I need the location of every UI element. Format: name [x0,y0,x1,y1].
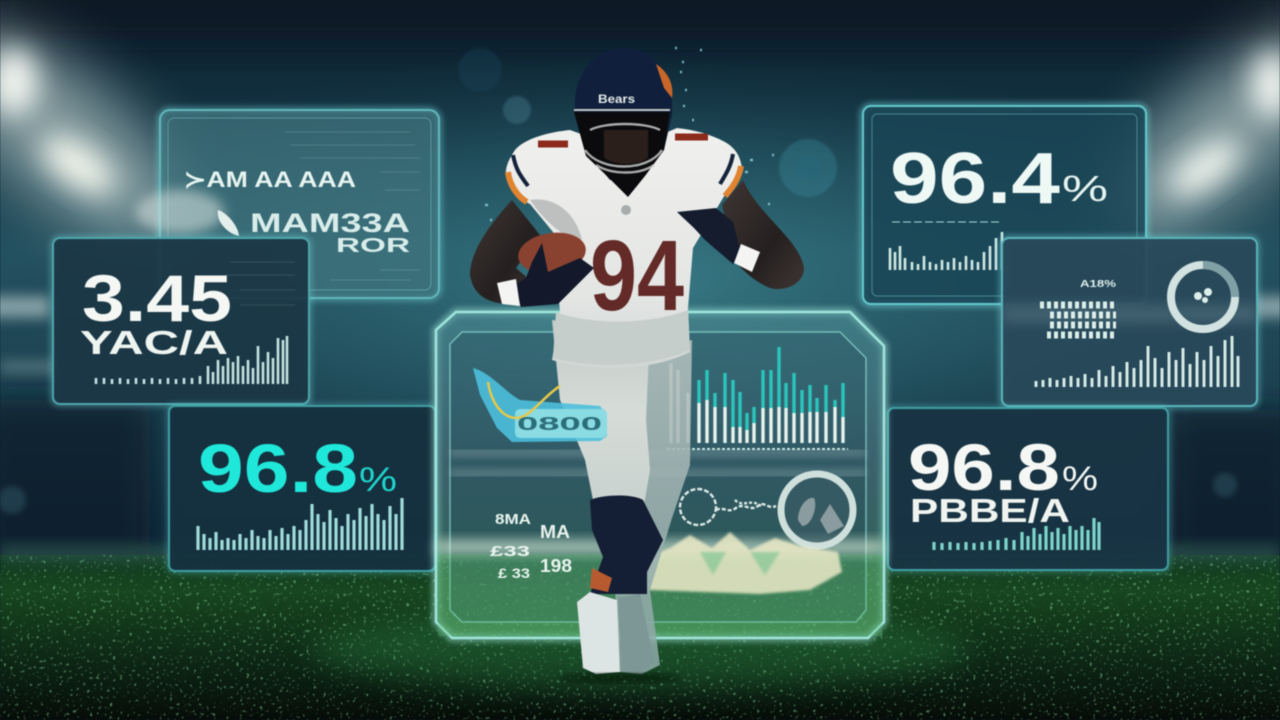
sleeve navy left [513,155,528,186]
jersey [506,128,742,368]
label glyphs: A18% [1080,279,1116,290]
glyph blob [218,210,239,236]
helmet [574,48,672,197]
left shoe [577,592,620,674]
helmet stripe [656,64,672,98]
area chart [647,532,842,594]
grass field [0,545,1280,720]
green field tint [438,554,882,636]
chart baseline [667,448,848,450]
bar chart [198,498,402,550]
network squiggle [680,489,776,525]
bar chart [1036,336,1238,387]
glyph label block: MA [540,522,570,542]
panel: center large [436,312,884,638]
face mask [574,112,670,197]
right arm [722,180,804,289]
value 96.8: 96.8 [908,430,1060,504]
shadow on field [560,673,680,683]
sock stripe [590,568,612,592]
inner frame [450,332,866,622]
ball hand glove [515,243,594,307]
value 3.45: 3.45 [82,261,232,335]
collar dot [621,205,631,215]
percent sign: % [1062,460,1098,498]
panel: 96.8% teal [169,406,435,571]
spark particles [485,48,774,220]
haze bands [450,452,866,474]
ring gauge [1171,265,1235,329]
percent sign: % [1062,168,1108,209]
ring gauge [781,474,853,546]
shield chart [473,368,607,442]
front thigh [552,320,650,505]
grass in area chart [700,552,780,575]
panel: 96.4% [863,106,1146,304]
shoulder marks [538,137,708,144]
value 96.4: 96.4 [890,139,1060,219]
sleeve navy right [720,154,733,184]
right shoe [618,594,654,674]
glyph label block: 8MA [495,511,531,528]
percent sign: % [359,461,397,499]
field glow strip [436,540,884,554]
stadium lights left [0,0,213,277]
bokeh circles [0,48,1237,514]
bar chart [934,518,1099,550]
panel: ring gauge [1002,238,1257,406]
right hand glove [677,208,741,264]
wrist tape [497,279,520,306]
helmet label: Bears [598,92,635,106]
player [470,48,804,674]
waist fold [553,310,690,365]
glyph label block: £ 33 [498,565,530,581]
bar chart [96,336,287,384]
mask bars [585,124,662,172]
label glyphs second row: MAM33A [250,208,410,238]
label YAC/A: YAC/A [80,324,228,361]
stadium lights right [1074,0,1280,274]
bar chart base [671,363,843,443]
panel: 96.8% PBBE/A [888,408,1168,570]
face [604,130,648,164]
label glyphs third row: ROR [336,235,411,257]
shield chart: 0800 [517,414,602,434]
football [516,228,588,278]
left arm [470,200,540,304]
panel: top left glyph stats [136,110,439,298]
jersey number: 94 [590,220,684,332]
underarm shadow [530,199,582,240]
value 96.8: 96.8 [198,430,358,507]
bar chart [890,232,1002,270]
sleeve orange right [725,166,741,196]
bar chart teal tops [699,347,843,430]
glyph label block: £33 [490,543,530,560]
label glyph rows [1040,305,1116,335]
right wrist tape [734,244,760,272]
rear leg [615,340,692,674]
sleeve orange left [508,172,527,202]
label PBBE/A: PBBE/A [910,492,1070,529]
glyph label block: 198 [540,556,572,576]
panel: YAC/A [53,238,309,404]
knee brace [590,496,663,594]
label glyphs top row: ≻AM AA AAA [184,167,356,192]
